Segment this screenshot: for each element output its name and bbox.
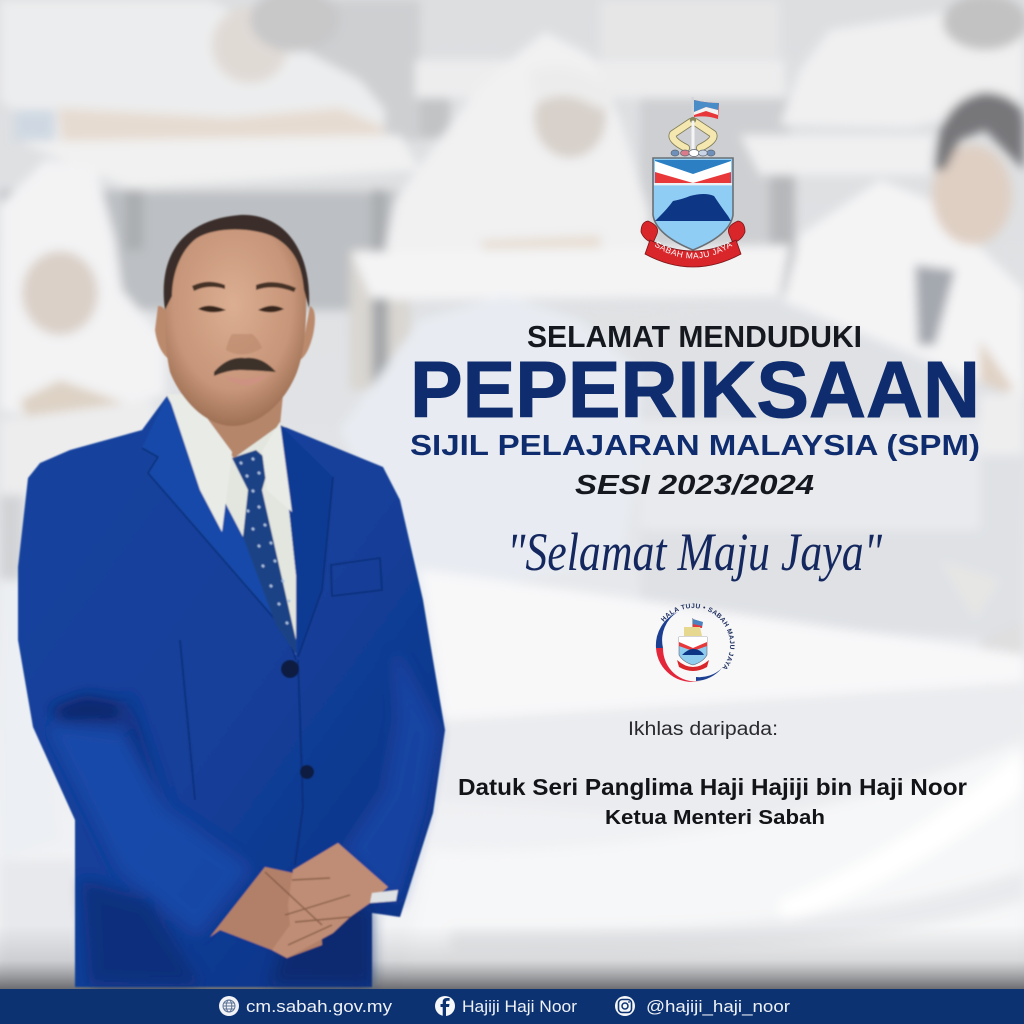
necktie	[232, 450, 296, 654]
lapels	[142, 396, 296, 655]
ring text: HALA TUJU • SABAH MAJU JAYA	[660, 604, 735, 669]
left hand	[210, 867, 322, 958]
nose shading	[226, 334, 262, 355]
icon: flag	[692, 97, 719, 149]
text: Ikhlas daripada: Ikhlas daripada:	[628, 719, 778, 740]
heading: Selamat Menduduki: SELAMAT MENDUDUKI	[527, 319, 862, 354]
shirt collar	[168, 394, 292, 532]
link: instagram: @hajiji_haji_noor	[646, 997, 790, 1016]
text: signatory name: Datuk Seri Panglima Haji Hajiji bin Haji Noor	[458, 774, 967, 800]
suit jacket	[18, 396, 445, 987]
state crest: Sabah coat of arms	[640, 97, 746, 268]
soft suit shading	[48, 650, 438, 985]
head	[165, 224, 306, 426]
scroll with motto	[640, 220, 746, 268]
ears	[155, 306, 315, 360]
heading: Sijil Pelajaran Malaysia: SIJIL PELAJARAN MALAYSIA (SPM)	[410, 430, 980, 462]
icon: globe	[219, 996, 239, 1016]
icon: facebook	[435, 996, 455, 1016]
ring crescent	[656, 612, 722, 682]
text: signatory title: Ketua Menteri Sabah	[605, 807, 825, 829]
footer bar	[0, 989, 1024, 1024]
scroll with motto: SABAH MAJU JAYA	[654, 242, 732, 259]
heading block	[410, 319, 980, 500]
icon: beads	[671, 150, 715, 156]
heading: session: SESI 2023/2024	[575, 469, 814, 500]
shirt cuff	[370, 890, 398, 903]
eyes	[198, 306, 284, 312]
portrait: man in blue suit	[18, 215, 445, 987]
logo: Hala Tuju Sabah Maju Jaya	[656, 604, 735, 682]
garment lines	[142, 448, 382, 865]
icon: shield	[653, 158, 733, 250]
neck	[178, 385, 284, 458]
icon: instagram	[615, 996, 635, 1016]
link: website: cm.sabah.gov.my	[246, 997, 393, 1016]
coat buttons	[281, 660, 314, 779]
shirt	[166, 396, 296, 650]
moustache	[214, 358, 276, 376]
finger lines	[265, 872, 350, 945]
small crest	[677, 618, 709, 671]
eyebrows	[192, 282, 296, 292]
script greeting: "Selamat Maju Jaya"	[507, 522, 882, 582]
heading: Peperiksaan: PEPERIKSAAN	[410, 345, 980, 434]
hair	[164, 215, 309, 310]
right hand	[272, 843, 388, 958]
icon: clasped arms	[673, 117, 713, 148]
link: facebook: Hajiji Haji Noor	[462, 997, 577, 1016]
mouth	[222, 374, 268, 385]
